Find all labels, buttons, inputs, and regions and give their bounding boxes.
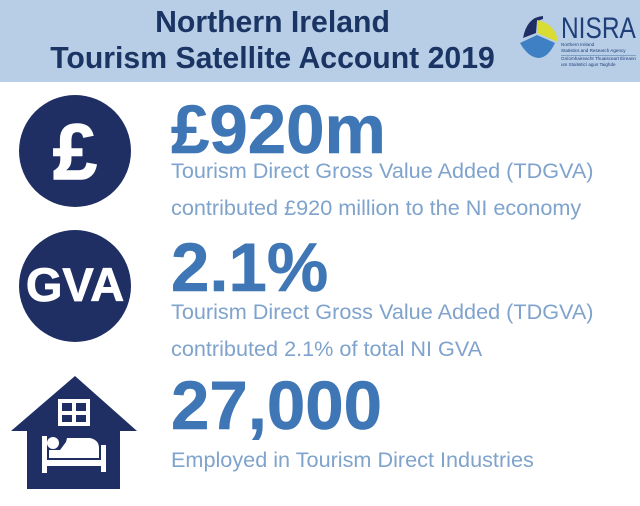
header band bbox=[0, 0, 640, 82]
text: £920m description bbox=[171, 158, 594, 220]
title: Northern Ireland bbox=[155, 6, 390, 38]
logo mark bbox=[520, 16, 558, 58]
logo small text: Statistics and Research Agency bbox=[561, 48, 626, 53]
icon: house with bed bbox=[11, 376, 137, 489]
headline: £920m: £920m bbox=[171, 91, 386, 168]
text: 27,000 description: Employed in Tourism Direct Industries bbox=[171, 447, 534, 472]
text: 2.1% description: Tourism Direct Gross Value Added (TDGVA) bbox=[171, 299, 594, 324]
logo small text: um Staitisticí agus Taighde bbox=[561, 62, 616, 67]
title: Tourism Satellite Account 2019 bbox=[50, 42, 495, 75]
headline: 2.1%: 2.1% bbox=[171, 229, 328, 306]
icon: pound circle: £ bbox=[53, 107, 97, 196]
icon: pound circle bbox=[19, 95, 131, 207]
icon: GVA circle bbox=[19, 230, 131, 342]
logo small text bbox=[561, 42, 636, 67]
text: £920m description: contributed £920 million to the NI economy bbox=[171, 194, 581, 220]
logo wordmark: NISRA bbox=[561, 12, 636, 45]
text: £920m description: Tourism Direct Gross Value Added (TDGVA) bbox=[171, 158, 594, 183]
logo small text: Northern Ireland bbox=[561, 42, 594, 47]
title bbox=[50, 6, 495, 75]
text: 2.1% description: contributed 2.1% of total NI GVA bbox=[171, 336, 482, 361]
logo small text: Gníomhaireacht Thuaisceart Éireann bbox=[561, 56, 636, 61]
NISRA logo bbox=[520, 12, 636, 67]
headline: 27,000: 27,000 bbox=[171, 367, 382, 444]
icon: GVA circle: GVA bbox=[26, 258, 124, 311]
text: 2.1% description bbox=[171, 299, 594, 361]
